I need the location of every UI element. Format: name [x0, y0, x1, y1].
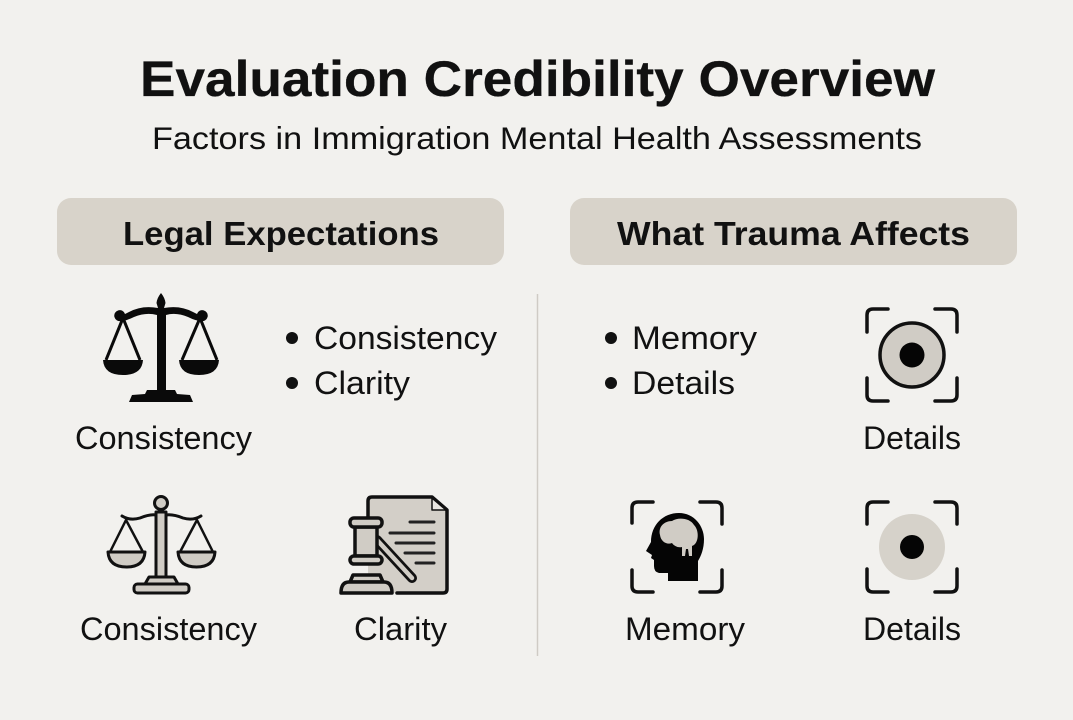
panel heading: Legal Expectations: Legal Expectations: [123, 215, 439, 252]
bullet list: what trauma affects: Memory: [632, 320, 757, 356]
panel heading: What Trauma Affects: [570, 198, 1017, 265]
label: Details: Details: [863, 420, 961, 456]
icon: eye in focus frame, outlined: [867, 309, 957, 401]
icon: gavel and document: [341, 497, 447, 593]
bullet list: what trauma affects: [605, 320, 757, 401]
icon: outlined scales of justice: [108, 496, 215, 593]
label: Consistency: Consistency: [80, 611, 257, 647]
label: Consistency: Consistency: [75, 420, 252, 456]
label: Clarity: Clarity: [354, 611, 447, 647]
icon: eye in focus frame, flat: [867, 502, 957, 592]
icon: head with brain in focus frame: [632, 502, 722, 592]
panel: legal expectations: [75, 293, 497, 647]
bullet list: what trauma affects: Details: [632, 365, 735, 401]
bullet list: legal expectations: Consistency: [314, 320, 497, 356]
label: Details: Details: [863, 611, 961, 647]
icon: solid scales of justice: [103, 293, 219, 402]
title: Evaluation Credibility Overview: [140, 51, 935, 107]
panel heading: What Trauma Affects: What Trauma Affects: [617, 215, 970, 252]
bullet list: legal expectations: Clarity: [314, 365, 410, 401]
panel heading: Legal Expectations: [57, 198, 504, 265]
subtitle: Factors in Immigration Mental Health Assessments: [152, 120, 922, 156]
bullet list: legal expectations: [286, 320, 497, 401]
label: Memory: Memory: [625, 611, 745, 647]
panel: what trauma affects: [605, 309, 961, 647]
